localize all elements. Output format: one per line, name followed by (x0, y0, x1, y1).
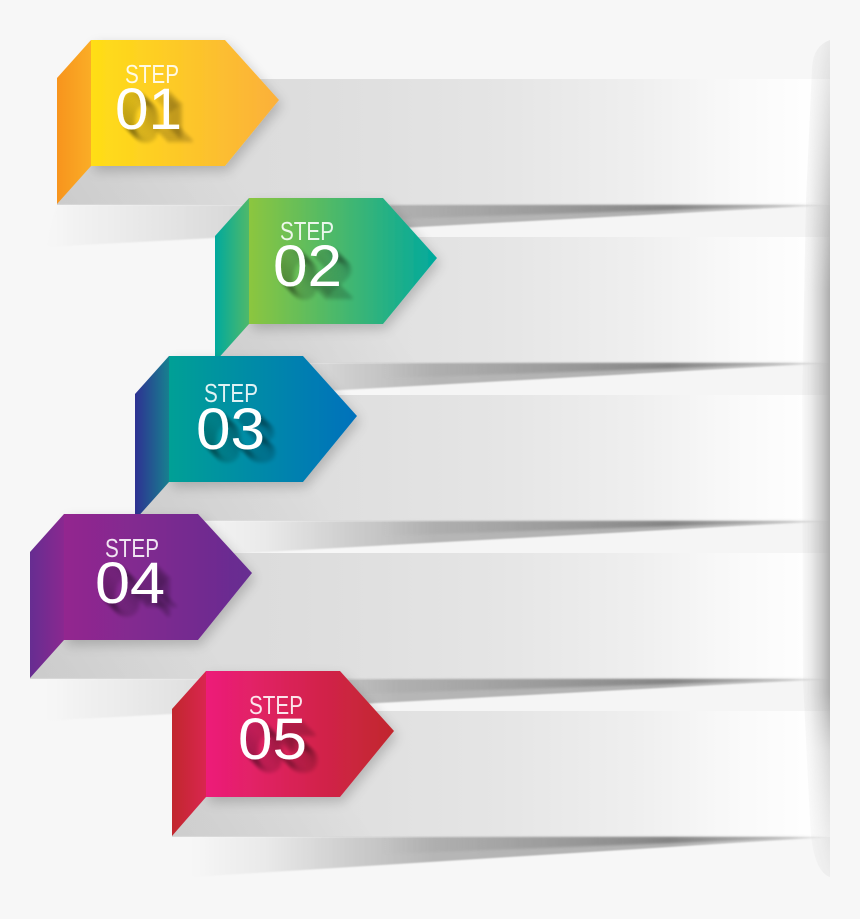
step 5 label: STEP (249, 690, 303, 720)
row 5 cast shadow (172, 837, 830, 878)
step 4 badge (30, 514, 252, 678)
step 2 label: STEP (280, 216, 334, 246)
step 5 number: 05 (238, 707, 307, 772)
step 4 label: STEP (105, 533, 159, 563)
row 1 cast shadow (45, 205, 830, 247)
right curved wall (805, 40, 830, 876)
step 4 number: 04 (95, 551, 165, 616)
bands between the rows (400, 205, 830, 711)
step 1 badge (57, 40, 279, 204)
step 1 label: STEP (125, 59, 179, 89)
step 3 badge (135, 356, 357, 520)
row 2 panel (215, 237, 830, 363)
row 3 panel (135, 395, 830, 521)
row 1 panel (57, 79, 830, 205)
row 4 panel (30, 553, 830, 679)
row 4 cast shadow (30, 679, 830, 721)
step 3 label: STEP (204, 378, 258, 408)
row 5 panel (172, 711, 830, 837)
row 3 cast shadow (135, 521, 830, 559)
row 2 cast shadow (215, 363, 830, 397)
step 1 number: 01 (115, 77, 182, 142)
step 3 number: 03 (196, 397, 265, 462)
step 5 badge (172, 671, 394, 836)
step 2 number: 02 (273, 234, 342, 299)
step 2 badge (215, 198, 437, 362)
